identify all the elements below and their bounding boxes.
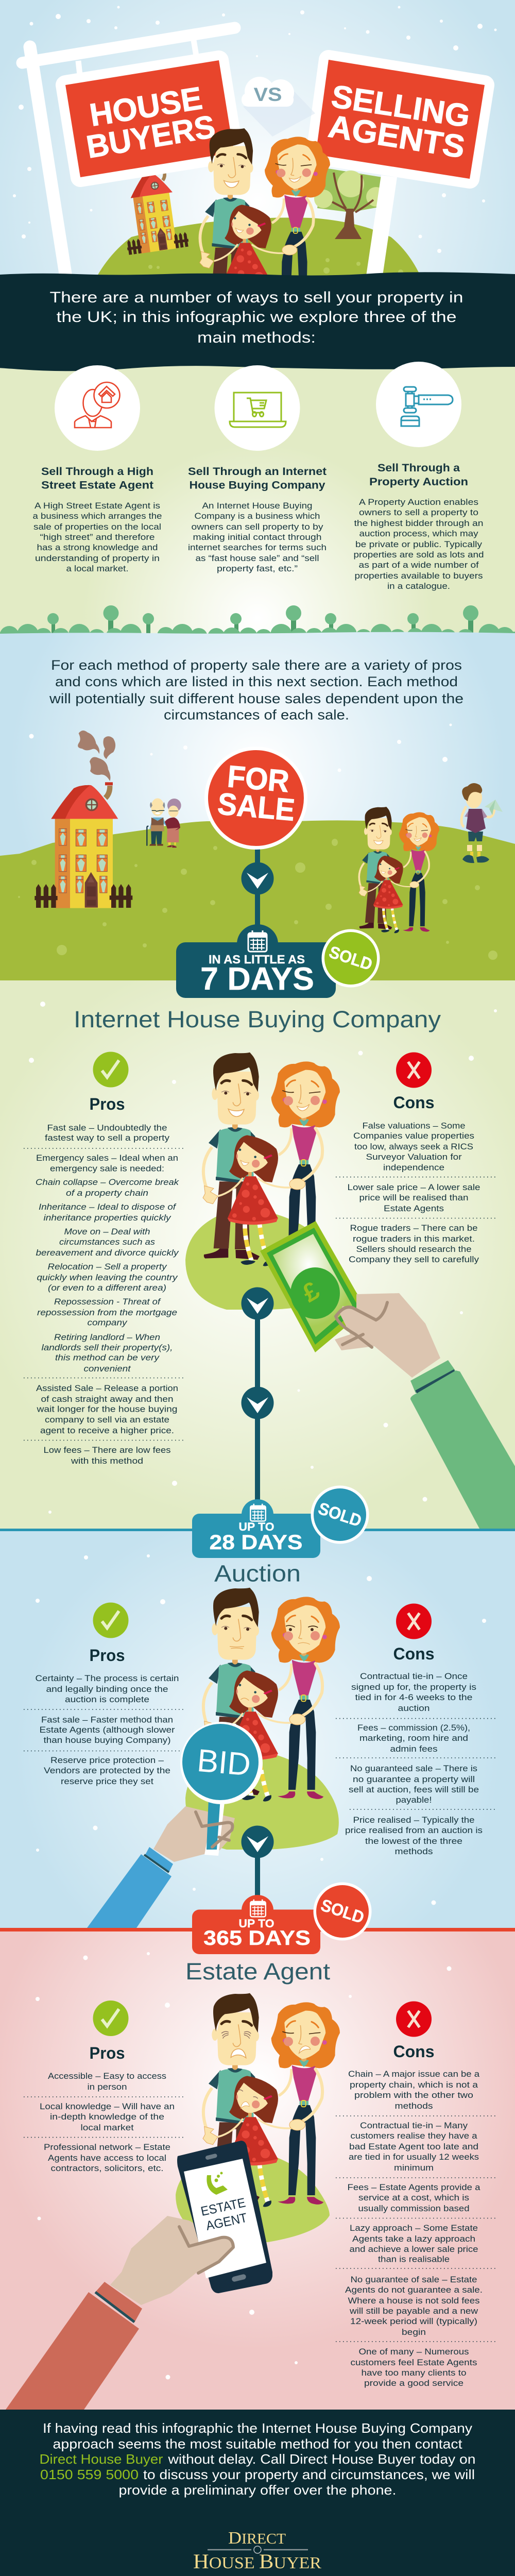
snow dots: internet xyxy=(29,1002,497,1514)
list: estate pros: Accessible – Easy to access xyxy=(48,2071,166,2081)
heading: pros: Pros xyxy=(90,1646,125,1665)
list: auction cons: signed up for, the property is xyxy=(351,1682,476,1692)
list: auction pros xyxy=(24,1673,184,1786)
text: pros and cons intro: circumstances of each sale. xyxy=(164,707,349,722)
list: estate cons: Contractual tie-in – Many xyxy=(360,2121,468,2130)
list: auction cons: no guarantee a property will xyxy=(353,1774,475,1784)
list: internet pros: emergency sale is needed: xyxy=(50,1163,164,1174)
illustration: hand holding phone xyxy=(6,2141,272,2410)
heading: Sell Through a High xyxy=(41,466,153,478)
list: estate cons: problem with the other two xyxy=(354,2090,473,2100)
list: auction pros: than house buying Company) xyxy=(43,1735,171,1745)
list: internet cons: independence xyxy=(383,1162,444,1173)
hill: green field xyxy=(0,820,515,980)
text: call to action: Direct House Buyer xyxy=(39,2451,163,2467)
list: internet pros xyxy=(24,1123,184,1466)
panel: method estate agent xyxy=(33,365,162,573)
list: auction cons: price realised from an auction is xyxy=(345,1825,483,1835)
list: estate pros: contractors, solicitors, etc. xyxy=(50,2163,164,2173)
text block: properties are sold as lots and xyxy=(353,550,484,560)
list: internet cons: rogue traders in this market. xyxy=(353,1234,475,1244)
arrow: chevron xyxy=(241,862,274,894)
list: internet pros: (or even to a different area) xyxy=(48,1283,166,1293)
list: estate cons: usually commission based xyxy=(358,2204,470,2213)
list: estate pros: Professional network – Estate xyxy=(44,2142,170,2152)
heading: Sell Through a xyxy=(377,462,460,474)
list: internet cons: Lower sale price – A lower sale xyxy=(347,1182,480,1192)
list: internet pros: Inheritance – Ideal to dispose of xyxy=(39,1202,177,1212)
list: estate cons: Lazy approach – Some Estate xyxy=(350,2223,478,2233)
list: auction cons: the lowest of the three xyxy=(365,1836,462,1846)
timeline: for sale to 7 days xyxy=(241,845,274,933)
list: estate pros: local market xyxy=(80,2123,134,2132)
list: internet cons: too low, always seek a RICS xyxy=(354,1142,473,1151)
list: internet pros: Emergency sales – Ideal when an xyxy=(36,1153,178,1163)
icon: pros check xyxy=(93,1052,129,1087)
text block: as “fast house sale” and “sell xyxy=(196,553,319,563)
text block: properties available to buyers xyxy=(354,571,483,581)
text: pros and cons intro: For each method of property sale there are a variety of pros xyxy=(51,657,462,673)
text block: An Internet House Buying xyxy=(202,501,312,511)
badge: 365 days: 365 DAYS xyxy=(203,1927,311,1950)
list: estate cons: Where a house is not sold fees xyxy=(348,2296,480,2306)
list: internet pros: with this method xyxy=(71,1456,143,1466)
list: internet pros: Retiring landlord – When xyxy=(54,1332,160,1342)
icon: calendar xyxy=(248,930,267,952)
heading: SELLING AGENTS: SELLING xyxy=(329,79,472,134)
icon: calendar xyxy=(250,1504,266,1521)
badge: 365 days: UP TO xyxy=(239,1917,274,1930)
list: auction pros: Estate Agents (although slower xyxy=(39,1725,175,1735)
list: auction cons: Contractual tie-in – Once xyxy=(360,1671,468,1681)
logo: direct house buyer: HOUSE BUYER xyxy=(193,2550,322,2573)
icon: estate agent xyxy=(55,365,140,451)
callout: VS cloud xyxy=(242,77,315,137)
divider: blue line xyxy=(0,1529,515,1532)
hill: auction xyxy=(185,1748,339,1850)
text: call to action: 0150 559 5000 xyxy=(40,2467,139,2482)
list: auction cons: admin fees xyxy=(390,1744,438,1754)
list: auction cons: methods xyxy=(394,1846,433,1856)
icon: pros check xyxy=(93,1602,129,1638)
field speckles xyxy=(18,839,497,960)
list: auction pros: Fast sale – Faster method than xyxy=(41,1715,173,1725)
heading: pros: Pros xyxy=(90,1095,125,1113)
badge: 28 days: 28 DAYS xyxy=(209,1531,303,1554)
list: auction cons: auction xyxy=(398,1703,430,1713)
heading xyxy=(41,466,153,492)
list: estate cons xyxy=(336,2069,497,2388)
list: internet cons: False valuations – Some xyxy=(363,1121,466,1130)
heading xyxy=(188,466,327,492)
snow dots: auction xyxy=(36,1554,486,1905)
treeline xyxy=(0,605,515,647)
stamp: sold green: SOLD xyxy=(327,942,375,974)
heading: HOUSE BUYERS: BUYERS xyxy=(84,109,218,165)
text block: sale of properties on the local xyxy=(33,522,161,532)
arrow: chevron xyxy=(241,1387,274,1419)
arrow: chevron xyxy=(241,1826,274,1858)
arrow: chevron xyxy=(241,1287,274,1320)
list: internet cons: Estate Agents xyxy=(384,1204,444,1213)
panel: auction xyxy=(0,1531,515,1928)
family: estate sad xyxy=(203,1993,340,2207)
snow dots: header xyxy=(13,6,496,253)
icon: cons cross xyxy=(396,1603,432,1639)
small yellow house xyxy=(117,168,190,255)
badge: 7 days xyxy=(176,924,336,998)
list: estate cons: Chain – A major issue can be a xyxy=(348,2069,480,2079)
text: call to action: provide a preliminary offer over the phone. xyxy=(118,2482,397,2498)
boy with paper plane xyxy=(461,783,503,863)
sign: for sale xyxy=(204,747,307,850)
divider: red line xyxy=(0,1928,515,1931)
text block: A Property Auction enables xyxy=(359,497,478,507)
list: auction cons: No guaranteed sale – There is xyxy=(350,1764,477,1773)
list: estate pros xyxy=(24,2071,184,2173)
list: internet cons: Rogue traders – There can be xyxy=(350,1223,478,1233)
sign: for sale: SALE xyxy=(216,786,296,827)
heading: Property Auction xyxy=(369,476,468,488)
list: auction pros: auction is complete xyxy=(65,1694,149,1704)
sign: selling agents xyxy=(316,60,485,276)
list: internet pros: Assisted Sale – Release a portion xyxy=(36,1383,178,1393)
text block: owners to sell a property to xyxy=(359,507,478,517)
text: intro: There are a number of ways to sell your property in xyxy=(49,289,464,306)
hill: estate xyxy=(176,2147,330,2242)
text: pros and cons intro xyxy=(49,657,464,722)
list: internet pros: agent to receive a higher price. xyxy=(40,1426,174,1435)
text block: the highest bidder through an xyxy=(354,518,483,528)
text block: internet searches for terms such xyxy=(188,543,327,552)
title: auction: Auction xyxy=(214,1560,301,1587)
list: estate pros: in person xyxy=(88,2082,127,2092)
text block: property fast, etc.” xyxy=(217,564,298,573)
text block: as part of a wide number of xyxy=(358,560,479,570)
badge: 365 days xyxy=(192,1895,320,1954)
heading: SELLING AGENTS: AGENTS xyxy=(326,109,467,165)
panel: estate agent xyxy=(0,1928,515,2410)
list: estate cons: property chain, which is not a xyxy=(350,2080,478,2090)
text: call to action: approach seems the most suitable method for you then contact xyxy=(53,2436,462,2451)
list: auction cons: sell at auction, fees will still be xyxy=(349,1785,479,1794)
list: estate cons: No guarantee of sale – Estate xyxy=(350,2275,477,2284)
badge: 7 days: IN AS LITTLE AS xyxy=(209,953,305,966)
text block: Company is a business which xyxy=(195,511,320,521)
list: internet pros: quickly when leaving the country xyxy=(37,1273,178,1282)
heading: cons: Cons xyxy=(393,2042,435,2061)
list: auction pros: Vendors are protected by the xyxy=(44,1766,170,1775)
list: internet pros: Repossession - Threat of xyxy=(54,1297,161,1307)
icon: pros check xyxy=(93,2001,129,2036)
text: call to action: If having read this infographic the Internet House Buying Company xyxy=(43,2420,472,2436)
icon: cons cross xyxy=(396,1052,432,1088)
house with smoke xyxy=(35,731,132,908)
list: internet pros: this method can be very xyxy=(55,1353,160,1362)
list: auction pros: Reserve price protection – xyxy=(50,1755,164,1765)
list: internet pros: circumstances such as xyxy=(59,1237,156,1247)
text: pros and cons intro: and cons which are listed in this next section. Each method xyxy=(55,674,458,689)
icon: cons cross xyxy=(396,2001,432,2037)
icon: calendar xyxy=(250,1900,266,1917)
list: estate cons: minimum xyxy=(394,2163,434,2173)
list: internet cons: Surveyor Valuation for xyxy=(366,1152,462,1162)
list: internet pros: Relocation – Sell a property xyxy=(47,1262,167,1272)
hill: header xyxy=(97,217,420,276)
heading: HOUSE BUYERS xyxy=(84,80,218,165)
badge: 7 days: 7 DAYS xyxy=(200,961,314,997)
list: auction cons: payable! xyxy=(396,1795,432,1805)
list: internet cons xyxy=(336,1121,497,1264)
stamp: sold blue: SOLD xyxy=(316,1499,364,1530)
list: internet pros: fastest way to sell a property xyxy=(45,1133,170,1143)
hill speckles xyxy=(148,258,403,275)
list: internet cons: Sellers should research the xyxy=(356,1244,472,1254)
heading: Sell Through an Internet xyxy=(188,466,327,478)
list: internet pros: landlords sell their property(s), xyxy=(41,1343,173,1352)
elderly couple xyxy=(147,798,181,848)
text block: a local market. xyxy=(66,564,129,573)
list: estate cons: bad Estate Agent too late and xyxy=(349,2142,478,2151)
list: estate cons: service at a cost, which is xyxy=(358,2193,469,2202)
sign: for sale: FOR xyxy=(226,759,290,799)
list: estate cons: methods xyxy=(394,2101,433,2111)
list: estate cons: provide a good service xyxy=(364,2378,464,2388)
icon: laptop cart xyxy=(214,365,300,451)
list: internet cons: Companies value properties xyxy=(353,1131,474,1141)
illustration: hand holding bid paddle: BID xyxy=(196,1743,252,1783)
hill: internet xyxy=(185,1207,338,1310)
list: auction cons: tied in for 4-6 weeks to the xyxy=(355,1692,473,1702)
text block: a business which arranges the xyxy=(33,511,162,521)
family: small happy xyxy=(359,807,439,933)
heading: cons: Cons xyxy=(393,1645,435,1663)
text: call to action xyxy=(39,2420,476,2498)
text block: owners can sell property to by xyxy=(192,522,323,532)
timeline: internet to 28 days xyxy=(241,1287,274,1502)
list: estate cons: Fees – Estate Agents provide a xyxy=(347,2182,480,2192)
heading: SELLING AGENTS xyxy=(326,79,472,165)
list: estate pros: Agents have access to local xyxy=(48,2153,166,2163)
list: estate cons: 12-week period will (typically) xyxy=(350,2316,477,2326)
list: internet pros: inheritance properties quickly xyxy=(43,1213,171,1223)
list: estate cons: customers realise they have a xyxy=(350,2131,477,2141)
text: intro: main methods: xyxy=(197,329,316,346)
badge: 28 days xyxy=(192,1499,320,1558)
list: estate cons: are tied in for usually 12 weeks xyxy=(349,2152,479,2162)
title: internet house buying company: Internet House Buying Company xyxy=(74,1006,441,1032)
text: pros and cons intro: will potentially suit different house sales dependent upon the xyxy=(49,691,464,706)
list: estate cons: have too many clients to xyxy=(362,2368,467,2378)
text block xyxy=(188,501,327,573)
text block: understanding of property in xyxy=(35,553,160,563)
list: estate cons: customers feel Estate Agents xyxy=(350,2358,477,2367)
list: internet pros: Low fees – There are low fees xyxy=(43,1445,171,1455)
list: estate cons: begin xyxy=(402,2327,426,2337)
list: internet pros: repossession from the mortgage xyxy=(37,1308,177,1317)
list: internet pros: Fast sale – Undoubtedly the xyxy=(47,1123,167,1132)
text block xyxy=(33,501,162,573)
list: internet pros: wait longer for the house buying xyxy=(36,1404,177,1414)
text block: be private or public. Typically xyxy=(355,539,483,549)
panel: for sale sky xyxy=(0,632,515,876)
list: auction pros: reserve price they set xyxy=(61,1776,153,1786)
list: estate cons: will still be payable and a new xyxy=(349,2306,478,2316)
text block: A High Street Estate Agent is xyxy=(35,501,160,511)
list: auction cons: Fees – commission (2.5%), xyxy=(357,1723,470,1733)
heading: HOUSE BUYERS: HOUSE xyxy=(87,80,204,133)
badge: 28 days: UP TO xyxy=(239,1520,274,1533)
panel: internet house buying xyxy=(0,980,515,1529)
tree xyxy=(314,168,386,239)
list: auction pros: Certainty – The process is certain xyxy=(35,1673,179,1683)
illustration: hand holding phone: ESTATE xyxy=(199,2195,247,2219)
text block xyxy=(353,497,484,591)
list: internet pros: of a property chain xyxy=(66,1188,148,1198)
text: intro xyxy=(49,289,464,346)
stamp: sold green xyxy=(321,929,380,987)
panel: footer xyxy=(0,2410,515,2576)
list: internet cons: price will be realised than xyxy=(359,1193,469,1202)
panel: header sky xyxy=(0,0,515,276)
heading: pros: Pros xyxy=(90,2044,125,2062)
sign: house buyers xyxy=(22,28,235,274)
list: estate cons: and achieve a lower sale price xyxy=(349,2244,478,2254)
text: call to action: without delay. Call Direct House Buyer today on xyxy=(167,2451,475,2467)
list: internet pros: convenient xyxy=(83,1364,131,1374)
list: internet pros: of cash straight away and then xyxy=(41,1394,173,1404)
title: estate agent: Estate Agent xyxy=(185,1958,331,1985)
list: auction cons xyxy=(336,1671,497,1856)
list: auction cons: Price realised – Typically the xyxy=(353,1815,475,1825)
icon: gavel xyxy=(376,362,461,447)
heading: House Buying Company xyxy=(190,479,325,492)
panel: method internet xyxy=(188,365,327,573)
list: internet pros: Move on – Deal with xyxy=(64,1227,150,1236)
timeline: auction to 365 days xyxy=(241,1826,274,1899)
list: auction cons: marketing, room hire and xyxy=(359,1733,468,1743)
list: internet cons: Company they sell to carefully xyxy=(349,1255,479,1264)
text: intro: the UK; in this infographic we explore three of the xyxy=(57,309,456,326)
list: internet pros: Chain collapse – Overcome break xyxy=(36,1177,180,1187)
callout: VS cloud: VS xyxy=(253,84,282,105)
family: auction neutral xyxy=(203,1588,340,1802)
family: internet happy xyxy=(203,1053,340,1266)
illustration: hand holding bid paddle xyxy=(87,1722,263,1928)
snow dots: estate xyxy=(36,1952,451,2379)
logo: direct house buyer: DIRECT xyxy=(228,2529,286,2548)
stamp: sold red xyxy=(313,1883,372,1940)
list: estate pros: Local knowledge – Will have an xyxy=(40,2102,175,2111)
text block: auction process, which may xyxy=(359,529,478,538)
stamp: sold blue xyxy=(311,1486,369,1544)
list: estate cons: than is realisable xyxy=(378,2255,450,2264)
panel: method auction xyxy=(353,362,484,591)
text block: “high street” and therefore xyxy=(40,532,154,542)
illustration: hand holding phone: AGENT xyxy=(204,2211,248,2233)
text block: has a strong knowledge and xyxy=(37,543,158,552)
list: internet pros: company xyxy=(88,1318,128,1327)
text block: making initial contact through xyxy=(193,532,321,542)
list: internet pros: bereavement and divorce quickly xyxy=(36,1248,179,1258)
text block: in a catalogue. xyxy=(387,581,450,591)
heading xyxy=(369,462,468,488)
list: estate pros: in-depth knowledge of the xyxy=(50,2112,164,2122)
band: intro dark xyxy=(0,272,515,371)
list: estate cons: Agents take a lazy approach xyxy=(352,2234,475,2244)
list: estate cons: One of many – Numerous xyxy=(358,2347,469,2357)
heading: Street Estate Agent xyxy=(41,479,153,492)
illustration: hand holding banknote xyxy=(260,1221,515,1529)
snow dots: sky xyxy=(29,723,452,772)
panel: methods background xyxy=(0,361,515,636)
icon: phone handset xyxy=(207,2172,228,2195)
list: internet pros: company to sell via an estate xyxy=(45,1415,169,1425)
list: estate cons: Agents do not guarantee a sale. xyxy=(345,2285,483,2295)
text: call to action: to discuss your property and circumstances, we will xyxy=(143,2467,475,2482)
list: auction pros: and legally binding once the xyxy=(46,1684,168,1694)
illustration: hand holding banknote: £ xyxy=(297,1276,324,1308)
logo: direct house buyer xyxy=(193,2529,322,2573)
family: header happy xyxy=(200,128,330,326)
heading: cons: Cons xyxy=(393,1093,435,1112)
stamp: sold red: SOLD xyxy=(319,1895,367,1927)
